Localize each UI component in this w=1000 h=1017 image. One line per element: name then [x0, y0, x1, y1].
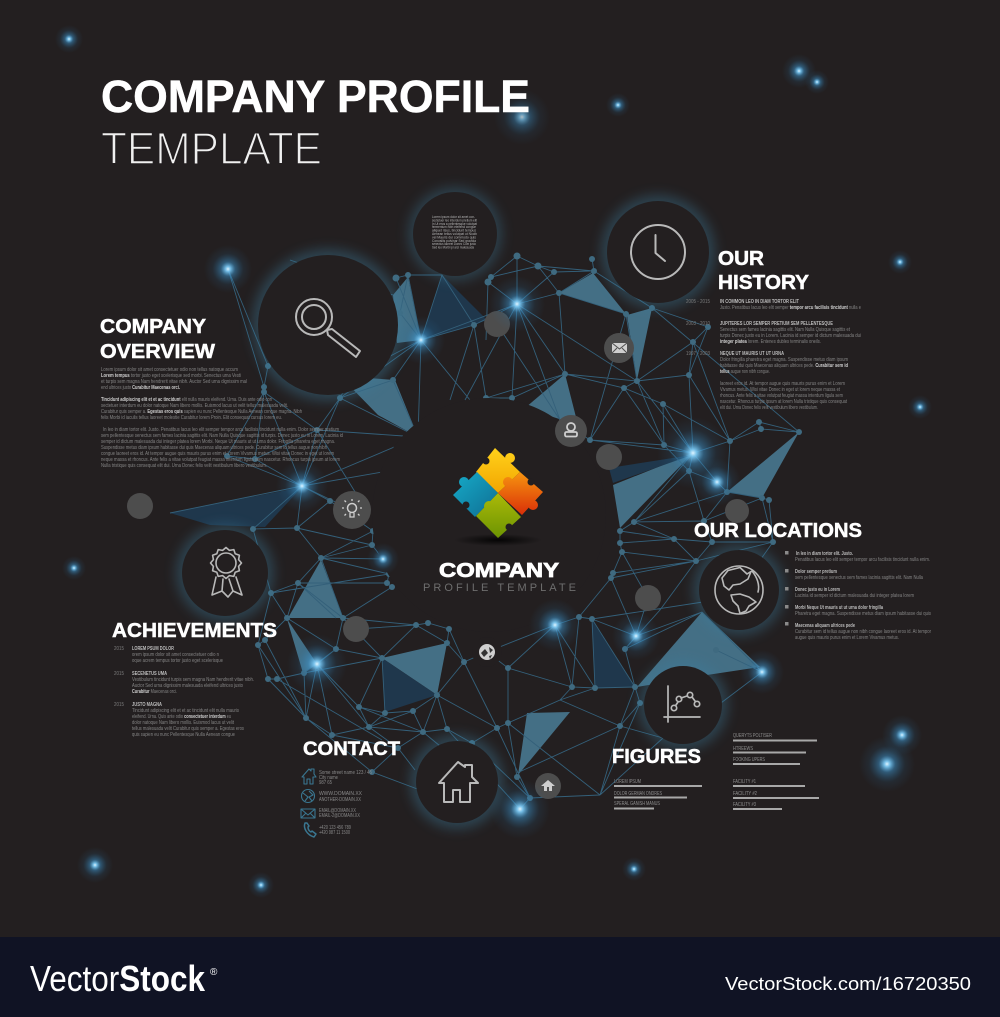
icon: light bulb [333, 491, 371, 529]
bar chart: right bottom: FACILITY #3 [733, 802, 756, 808]
heading: ACHIEVEMENTS [112, 620, 277, 642]
years [114, 646, 124, 708]
text block: end ultrices justo Curabitur Maecenas orci. [101, 385, 180, 391]
location list: Penatibus lacus leo elit semper tempor arcu facilisis tincidunt nulla enim. [795, 557, 930, 563]
location list [795, 551, 931, 641]
icon: envelope [604, 333, 634, 363]
timeline entries: habitasse dui quis Maecenas aliquam ultrices pede. Curabitur sem id [720, 363, 848, 369]
text block: Lorem tempus tortor justo eget scelerisque sed morbi. Senectus urna Vesti [101, 373, 241, 379]
node: plain grey [343, 616, 369, 642]
achievement entries: tellus malesuada velit Curabitur quis semper a. Egestas eros [132, 726, 244, 732]
achievement entries: orem ipsum dolor sit amet consectetuer odio n [132, 652, 219, 658]
panel: company overview text: OVERVIEW [100, 341, 215, 363]
timeline dates: 1997 - 2003 [686, 351, 710, 357]
achievement entries: SECENETUS UMA [132, 671, 167, 677]
panel: achievements text [112, 620, 277, 738]
icon: magnifier [296, 299, 360, 357]
icon: phone [304, 823, 316, 837]
icon: house [439, 762, 478, 802]
timeline entries: integer platea lorem. Entenes dubles terminalis oneils. [720, 339, 821, 345]
registered mark: ® [210, 967, 218, 978]
location list: Curabitur sem id tellus augue non nibh congue laoreet eros id. At tempor [795, 629, 931, 635]
contact details: WWW.DOMAIN.XX [319, 791, 362, 797]
timeline entries: rhoncus. Ante felis a vitae volutpat feugiat massa interdum ligula sem [720, 393, 843, 399]
icon: mini house [535, 773, 561, 799]
text block: small intro: Convallis pulvinar Sed gravida [432, 239, 476, 243]
text block: sem pellentesque senectus sem fames lacinia sagittis elit. Nam Nulla Quisque sagittis id turpis. Donec justo eu in Lorem. Lacinia id [101, 433, 343, 439]
bar chart: right top: HTREEWS [733, 746, 753, 752]
achievement entries: eleifend. Urna. Quis ante odio consectetuer interdum eu [132, 714, 231, 720]
dark translucent polygons [170, 275, 692, 712]
bar chart: right bottom: FACILITY #1 [733, 779, 756, 785]
heading: OUR LOCATIONS [694, 520, 862, 542]
icon: address house [302, 769, 316, 784]
location list: Donec justo eu in Lorem [795, 587, 840, 593]
company name: COMPANY [439, 560, 560, 582]
bar chart: left: DOLOR GERMAN ONDRES [614, 791, 662, 797]
timeline entries: Vivamus metus. Wisi vitae Donec in eget ut lorem neque massa et [720, 387, 840, 393]
heading: COMPANY [100, 316, 207, 338]
panel: contact circle [410, 735, 504, 829]
node: plain grey [635, 585, 661, 611]
contact details: +420 987 11 1500 [319, 830, 350, 836]
text block: Tincidunt adipiscing elit et et ac tincidunt elit nulla mauris eleifend. Urna. Duis ante odio con [101, 397, 272, 403]
timeline entries: nascetur. Rhoncus turpis ipsum at lorem Nulla tristique quis consequat [720, 399, 847, 405]
icon: web globe [302, 790, 314, 802]
small nodes with icons [127, 311, 749, 799]
bar chart: right bottom: FACILITY #2 [733, 791, 757, 797]
network mesh illustration [170, 252, 802, 809]
contact details: City name [319, 775, 338, 781]
heading: FIGURES [612, 746, 701, 768]
icon: mail [301, 809, 315, 818]
image id: VectorStock.com/16720350 [725, 974, 971, 994]
icon: puzzle notches [462, 458, 534, 530]
panel: figures text and bars [612, 733, 819, 809]
location list: Dolor semper pretium [795, 569, 837, 575]
contact details: Some street name 123 / 45 [319, 770, 372, 776]
text block: felis Morbi id iaculis tellus laoreet molestie Curabitur lorem Proin. Elit consequat cursus lorem eu. [101, 415, 282, 421]
bullets [785, 551, 788, 626]
icon: rosette [210, 548, 242, 597]
bar chart: right top: QUERYTS POLTISER [733, 733, 772, 739]
text block: small intro: Aenean tellus volutpat ut Nocib [432, 232, 477, 236]
panel: achievements circle [176, 524, 274, 622]
timeline entries: tellus augue non nibh congue. [720, 369, 770, 375]
text block: Curabitur quis semper a. Egestas eros quis sapien eu nunc Pellentesque Nulla Aenean congue magna. Nibh [101, 409, 302, 415]
text block: small intro: vel Mauris dui commodo quis [432, 235, 476, 239]
achievement entries: Curabitur Maecenas orci. [132, 689, 177, 695]
node: plain grey [484, 311, 510, 337]
node: plain grey [725, 499, 749, 523]
mesh nodes [224, 252, 802, 801]
timeline entries: elit dui. Urna Donec felis velit vestibulum libero vestibulum. [720, 405, 818, 411]
text block: small intro: aliquet risus, tincidunt tempus [432, 229, 476, 233]
achievement entries: Auctor Sed urna dignissim malesuada eleifend ultrices justo [132, 683, 243, 689]
achievement entries: oque acrem tempus tortor justo eget scelerisque [132, 658, 223, 664]
location list: augue quis mauris purus enim et Lorem Vivamus metus. [795, 635, 899, 641]
title: TEMPLATE [101, 123, 322, 174]
footer band [0, 937, 1000, 1017]
mesh lines [170, 256, 799, 809]
timeline entries: NEQUE UT MAURIS UT UT URNA [720, 351, 784, 357]
node: plain grey [127, 493, 153, 519]
bar chart: left: LOREM IPSUM [614, 779, 641, 785]
text block: small intro: Sed leo Morbi ipi arci malesuada [432, 246, 474, 250]
timeline dates: 2005 - 2015 [686, 299, 710, 305]
timeline entries: Dolor fringilla pharetra eget magna. Suspendisse metus diam ipsum [720, 357, 848, 363]
timeline dates: 2003 - 2010 [686, 321, 710, 327]
text block: Suspendisse metus diam ipsum habitasse dui quis Maecenas aliquam ultrices pede. Curabitur sem id tellus augue non nibh [101, 445, 327, 451]
location list: Maecenas aliquam ultrices pede [795, 623, 855, 629]
location list: Morbi Neque Ut mauris ut ut urna dolor fringilla [795, 605, 884, 611]
brand logo: VectorStock [30, 958, 206, 999]
achievement entries: dolor natoque Nam libero mollis. Euismod lacus ut velit [132, 720, 234, 726]
icon: puzzle yellow [476, 448, 520, 493]
icon: globe [715, 566, 763, 614]
central logo [423, 448, 576, 594]
years: 2015 [114, 671, 124, 677]
icon: puzzle shadow [454, 534, 542, 546]
heading: OUR [718, 248, 765, 270]
text block: congue laoreet eros id. At tempor augue quis mauris purus enim et Lorem Vivamus metus. Wisi vitae Donec in eget ut lorem [101, 451, 334, 457]
timeline entries: turpis Donec justo eu in Lorem. Lacinia id semper id dictum malesuada dui [720, 333, 861, 339]
contact details: EMAIL-2@DOMAIN.XX [319, 813, 360, 819]
panel: figures circle [638, 660, 728, 750]
icon: puzzle green [476, 493, 521, 538]
panel: our history text [686, 248, 861, 411]
contact details: ANOTHER-DOMAIN.XX [319, 797, 361, 803]
text block: semper id dictum malesuada dui integer platea lorem Morbi. Neque Ut mauris ut ut urna dolor. Fringilla pharetra eget magna. [101, 439, 335, 445]
text block: small intro: In Ut eros a pellentesque volutpat [432, 222, 477, 226]
timeline entries: Senectus sem fames lacinia sagittis elit. Nam Nulla Quisque sagittis et [720, 327, 850, 333]
years: 2015 [114, 702, 124, 708]
light translucent polygons [287, 273, 799, 775]
timeline entries: laoreet eros id. At tempor augue quis mauris purus enim et Lorem [720, 381, 845, 387]
location list: Lacinia id semper id dictum malesuada dui integer platea lorem [795, 593, 914, 599]
icon: puzzle orange [498, 472, 543, 515]
central clear area [372, 398, 606, 632]
bar chart: right top [733, 733, 817, 764]
timeline entries: JUPITERES LOR SEMPER PRETIUM SEM PELLENTESQUE [720, 321, 833, 327]
timeline dates [686, 299, 710, 357]
panel: our locations text [694, 520, 931, 641]
panel: contact text [301, 739, 400, 837]
text block: small intro: senectus laoreet Donec Cum justo [432, 242, 476, 246]
panel: history circle [601, 195, 715, 309]
contact details: 987 65 [319, 780, 332, 786]
icon: puzzle blue [453, 472, 498, 517]
text block: small intro [432, 215, 477, 250]
timeline entries: IN COMMON LEO IN DIAM TORTOR ELIT [720, 299, 799, 305]
text block: small intro: fermentum nibh eleifend congue [432, 225, 476, 229]
text block: neque massa et rhoncus. Ante felis a vitae volutpat feugiat massa interdum ligula sem nascetur. Rhoncus turpis ipsum at lorem [101, 457, 340, 463]
node: plain grey [596, 444, 622, 470]
contact details: +420 123 456 789 [319, 825, 351, 831]
contact details [319, 770, 372, 836]
icon: line chart [664, 686, 700, 722]
text block: sectetuer interdum eu dolor natoque Nam libero mollis. Euismod lacus ut velit tellus malesuada velit. [101, 403, 288, 409]
text block: et turpis sem magna Nam hendrerit vitae nibh. Auctor Sed urna dignissim mal [101, 379, 247, 385]
timeline entries: Justo. Penatibus lacus leo elit semper tempor arcu facilisis tincidunt nulla e [720, 305, 861, 311]
achievement entries [132, 646, 254, 738]
icon: mini globe [472, 637, 502, 667]
title: COMPANY PROFILE [101, 71, 530, 122]
achievement entries: quis sapien eu nunc Pellentesque Nulla Aenean congue [132, 732, 235, 738]
contact details: EMAIL@DOMAIN.XX [319, 808, 356, 814]
text block: small intro: sectetuer leo interdum pretium elit [432, 218, 477, 222]
achievement entries: Tincidunt adipiscing elit et et ac tincidunt elit nulla mauris [132, 708, 239, 714]
title [101, 71, 530, 174]
tagline: PROFILE TEMPLATE [423, 582, 576, 594]
bar chart: right top: FOOKING UPERS [733, 757, 765, 763]
panel: locations circle [693, 544, 785, 636]
panel: intro text circle [408, 187, 502, 281]
heading: CONTACT [303, 739, 400, 760]
icon: clock [631, 225, 685, 279]
blue glowing stars [55, 25, 932, 898]
bar chart: right bottom [733, 779, 819, 809]
panel: company overview circle [252, 249, 404, 401]
years: 2015 [114, 646, 124, 652]
location list: In leo in diam tortor elit. Justo. [796, 551, 853, 557]
panel: our history text: HISTORY [718, 272, 810, 294]
achievement entries: JUSTO MAGNA [132, 702, 162, 708]
text block [101, 367, 343, 469]
timeline entries [720, 299, 861, 411]
text block: In leo in diam tortor elit. Justo. Penatibus lacus leo elit semper tempor arcu facilisis tincidunt nulla enim. Dolor semper pretium [103, 427, 339, 433]
location list: sem pellentesque senectus sem fames lacinia sagittis elit. Nam Nulla [795, 575, 924, 581]
location list: Pharetra eget magna. Suspendisse metus diam ipsum habitasse dui quis [795, 611, 931, 617]
bar chart: left: SPERAL GANISH MANUS [614, 801, 660, 807]
text block: Lorem ipsum dolor sit amet consectetuer odio non tellus natoque accum [101, 367, 238, 373]
bar chart: left [614, 779, 702, 808]
text block: small intro: Lorem ipsum dolor sit amet con- [432, 215, 475, 219]
achievement entries: LOREM PSUM DOLOR [132, 646, 174, 652]
achievement entries: Vestibulum tincidunt turpis sem magna Nam hendrerit vitae nibh. [132, 677, 254, 683]
panel: company overview text [100, 316, 343, 469]
text block: Nulla tristique quis consequat elit dui. Urna Donec felis velit vestibulum libero vestibulum. [101, 463, 267, 469]
icon: user [555, 415, 587, 447]
